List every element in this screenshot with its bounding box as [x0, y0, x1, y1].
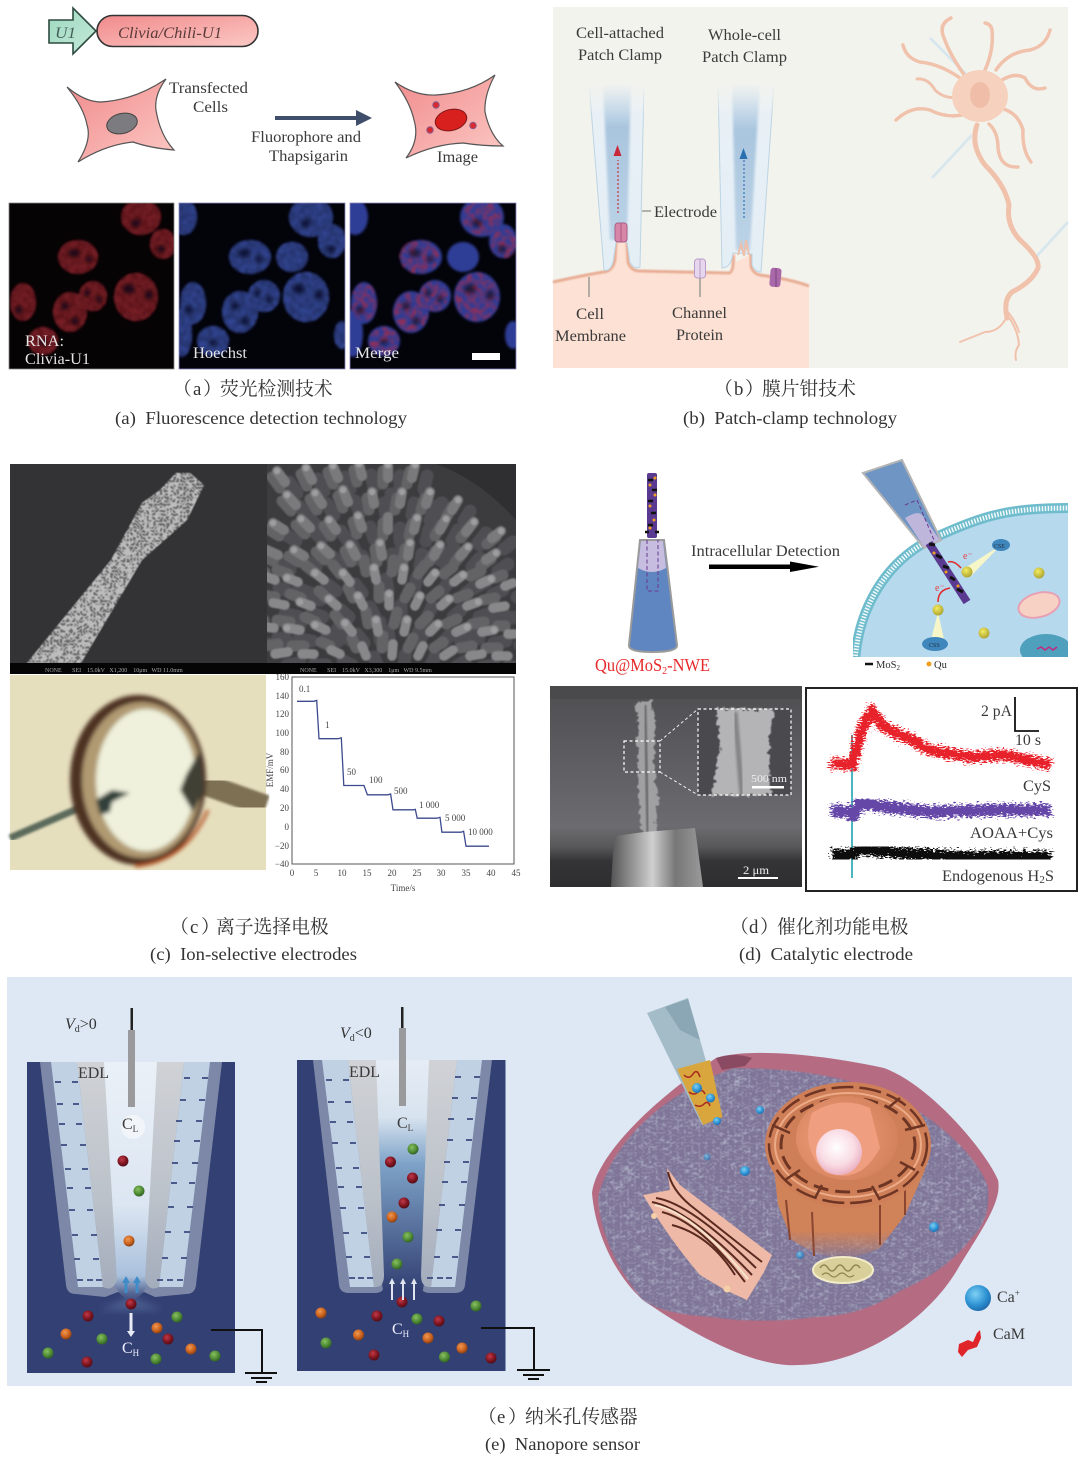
- icon: Clivia/Chili-U1 construct: [97, 16, 258, 46]
- label: Fluorophore and Thapsigarin: Thapsigarin: [269, 148, 348, 165]
- electrode: cell-attached: [589, 83, 644, 270]
- caption b: （: [714, 378, 733, 400]
- nanopipette: [647, 998, 722, 1125]
- label: Qu@MoS2-NWE: 2: [662, 665, 667, 677]
- legend: [865, 660, 948, 672]
- chart: amperometric traces: 2 pA: [981, 703, 1012, 720]
- mitochondrion: [813, 1257, 873, 1283]
- icon: imaged cell: [395, 75, 503, 158]
- chart: EMF vs time: 5 000: [445, 813, 466, 823]
- label: Qu@MoS2-NWE: Qu@MoS: [595, 655, 669, 675]
- caption a: ）: [203, 378, 222, 400]
- label: Fluorophore and Thapsigarin: [251, 129, 361, 165]
- chart: EMF vs time: 40: [486, 868, 496, 878]
- nanopore unit: Vd less than 0: V: [340, 1025, 350, 1042]
- caption a: （: [173, 378, 192, 400]
- SEM: electrode overview: NONE SEI 15.0kV X1,200 10μm WD 11.0mm: [45, 668, 183, 674]
- nanopore unit: Vd greater than 0: H: [133, 1348, 140, 1358]
- icon: Clivia/Chili-U1 construct: Clivia/Chili-U1: [118, 25, 222, 42]
- arrow: detection: [709, 562, 819, 572]
- chart: EMF vs time: Time/s: [391, 883, 416, 893]
- caption b: (b) Patch-clamp technology: [683, 408, 897, 429]
- chart: EMF vs time: 0: [290, 868, 295, 878]
- micrograph: Merge: Merge: [355, 345, 399, 362]
- chart: EMF vs time: 1 000: [419, 800, 440, 810]
- caption e: e: [497, 1407, 505, 1428]
- nanopore unit: Vd greater than 0: [27, 1008, 277, 1382]
- caption b: b: [734, 379, 743, 400]
- micrograph: Merge: [342, 197, 521, 369]
- SEM: electrode overview: [10, 464, 267, 674]
- chart: EMF vs time: 60: [280, 765, 290, 775]
- chart: amperometric traces: Endogenous H: [942, 868, 1037, 885]
- chart: EMF vs time: 35: [462, 868, 471, 878]
- legend: 2: [896, 664, 900, 672]
- caption e: （: [478, 1406, 497, 1428]
- caption a: (a) Fluorescence detection technology: [115, 408, 407, 429]
- channel proteins: [615, 223, 782, 287]
- chart: EMF vs time: 45: [512, 868, 521, 878]
- nanopore unit: Vd greater than 0: C: [122, 1340, 133, 1357]
- chart: EMF vs time: 50: [347, 767, 356, 777]
- nanopore unit: Vd greater than 0: V: [65, 1016, 75, 1033]
- diagram: electrode in cell: e⁻: [963, 551, 973, 562]
- panel e: nanopore sensor: [7, 977, 1072, 1386]
- photo: cell with pipettes: [10, 675, 266, 870]
- labels: Patch Clamp: [578, 47, 662, 64]
- legend: Ca+ and CaM: +: [1015, 1288, 1020, 1298]
- micrograph: RNA Clivia-U1: Clivia-U1: [25, 351, 90, 368]
- nanopore unit: Vd greater than 0: C: [122, 1116, 133, 1133]
- chart: amperometric traces: 10 s: [1015, 732, 1041, 749]
- legend: MoS: [876, 660, 896, 671]
- nanopore unit: Vd less than 0: <0: [355, 1025, 372, 1042]
- panel c: ion-selective electrodes: [10, 464, 527, 893]
- micrograph: RNA Clivia-U1: RNA:: [25, 333, 64, 350]
- chart: amperometric traces: CyS: [1023, 778, 1051, 795]
- chart: EMF vs time: −40: [275, 859, 289, 869]
- labels: Cell: [576, 306, 605, 323]
- caption d: d: [749, 917, 759, 938]
- legend: Ca+ and CaM: Ca: [997, 1289, 1015, 1306]
- label: Transfected Cells: Transfected: [169, 80, 248, 97]
- caption b: ）: [745, 378, 764, 400]
- rim shadows: [716, 1055, 752, 1070]
- chart: amperometric traces: S: [1045, 868, 1054, 885]
- chart: EMF vs time: [265, 672, 521, 893]
- chart: EMF vs time: 140: [276, 691, 290, 701]
- chart: EMF vs time: 10 000: [468, 827, 493, 837]
- labels: Membrane: [555, 328, 626, 345]
- caption a: 荧光检测技术: [220, 378, 333, 400]
- nanopore unit: Vd less than 0: C: [392, 1321, 403, 1338]
- nanowire electrode: [629, 473, 677, 652]
- cell membrane: [553, 242, 809, 368]
- chart: EMF vs time: 20: [388, 868, 397, 878]
- chart: amperometric traces: AOAA+Cys: [970, 825, 1053, 842]
- panel background: [553, 7, 1068, 368]
- cytoplasm surface: [598, 1068, 988, 1321]
- chart: EMF vs time: 30: [436, 868, 446, 878]
- caption e: [478, 1406, 640, 1455]
- chart: amperometric traces: [806, 688, 1077, 891]
- chart: EMF vs time: 160: [276, 672, 290, 682]
- icon: transfected cell: [67, 79, 174, 162]
- panel b: patch clamp: [553, 7, 1068, 368]
- micrograph: RNA Clivia-U1: [9, 199, 176, 369]
- diagram: electrode in cell: CSE: [994, 544, 1005, 550]
- nanopore unit: Vd greater than 0: >0: [80, 1016, 97, 1033]
- labels: Channel: [672, 305, 728, 322]
- SEM: nanorods: NONE SEI 15.0kV X3,300 1μm WD 9.5mm: [300, 668, 432, 674]
- caption a: [115, 378, 407, 429]
- chart: EMF vs time: 0.1: [299, 684, 310, 694]
- cell wall: [592, 1053, 999, 1365]
- icon: U1 promoter arrow: U1: [55, 25, 76, 42]
- caption c: c: [190, 917, 198, 938]
- labels: Protein: [676, 327, 723, 344]
- labels: [555, 25, 787, 345]
- caption c: 离子选择电极: [216, 915, 329, 938]
- chart: EMF vs time: 40: [280, 784, 290, 794]
- label: Qu@MoS2-NWE: -NWE: [667, 655, 710, 675]
- nanopore unit: Vd less than 0: [297, 1007, 550, 1379]
- leader lines: [589, 211, 700, 297]
- caption c: （: [170, 916, 189, 938]
- label: Intracellular Detection: Intracellular Detection: [691, 543, 840, 560]
- caption c: (c) Ion-selective electrodes: [150, 944, 357, 965]
- diagram: electrode in cell: CSS: [929, 643, 940, 649]
- panel background: [7, 977, 1072, 1386]
- chart: EMF vs time: 100: [276, 728, 290, 738]
- chart: EMF vs time: 25: [412, 868, 422, 878]
- chart: EMF vs time: 1: [325, 720, 330, 730]
- nanopore unit: Vd less than 0: d: [350, 1033, 355, 1044]
- panel d: catalytic electrode: [550, 460, 1077, 891]
- nanopore unit: Vd greater than 0: L: [133, 1124, 138, 1134]
- caption d: （: [730, 916, 749, 938]
- Golgi apparatus: [643, 1168, 772, 1300]
- caption d: (d) Catalytic electrode: [739, 944, 913, 965]
- caption d: [730, 915, 913, 965]
- SEM: nanowire electrode: 2 μm: [743, 865, 769, 877]
- caption e: 纳米孔传感器: [525, 1406, 638, 1428]
- legend: Ca+ and CaM: [958, 1285, 1025, 1357]
- electrode: whole-cell: [718, 83, 774, 272]
- labels: Patch Clamp: [702, 49, 787, 66]
- diagram: electrode in cell: [855, 460, 1075, 666]
- labels: Whole-cell: [708, 27, 782, 44]
- chart: EMF vs time: 500: [394, 786, 408, 796]
- diagram: electrode in cell: e⁻: [935, 583, 945, 594]
- label: Transfected Cells: [169, 80, 248, 116]
- nanopore unit: Vd less than 0: EDL: [349, 1064, 380, 1081]
- chart: EMF vs time: −20: [275, 841, 289, 851]
- nanopore unit: Vd less than 0: H: [403, 1329, 410, 1339]
- caption e: (e) Nanopore sensor: [485, 1434, 640, 1455]
- caption b: [683, 378, 897, 429]
- 3D cell: [592, 998, 999, 1365]
- arrow: treatment: [275, 110, 372, 126]
- icon: U1 promoter arrow: [49, 8, 96, 54]
- nanopore unit: Vd greater than 0: EDL: [78, 1065, 109, 1082]
- legend: Qu: [934, 660, 948, 671]
- SEM: nanowire electrode: 500 nm: [751, 774, 787, 785]
- label: Image: Image: [437, 149, 478, 166]
- caption d: ）: [760, 916, 779, 938]
- neuron: [896, 18, 1068, 360]
- SEM: nanorods: [256, 464, 527, 674]
- chart: EMF vs time: 10: [338, 868, 347, 878]
- legend: Ca+ and CaM: CaM: [993, 1326, 1025, 1343]
- caption d: 催化剂功能电极: [777, 915, 909, 938]
- chart: EMF vs time: 20: [280, 803, 290, 813]
- chart: EMF vs time: 80: [280, 747, 290, 757]
- caption c: ）: [201, 916, 220, 938]
- nanopore unit: Vd less than 0: L: [408, 1123, 413, 1133]
- caption a: a: [193, 379, 202, 400]
- caption c: [150, 915, 357, 965]
- chart: EMF vs time: 100: [369, 775, 383, 785]
- calcium ions: [704, 1106, 939, 1259]
- chart: amperometric traces: 2: [1039, 874, 1045, 886]
- labels: Electrode: [654, 204, 717, 221]
- label: Transfected Cells: Cells: [193, 99, 228, 116]
- nanopore unit: Vd less than 0: C: [397, 1115, 408, 1132]
- SEM: nanowire electrode: [550, 686, 802, 887]
- chart: EMF vs time: 5: [314, 868, 319, 878]
- caption b: 膜片钳技术: [762, 378, 856, 400]
- chart: EMF vs time: EMF/mV: [265, 752, 275, 787]
- chart: EMF vs time: 0: [284, 822, 290, 832]
- micrograph: Hoechst: [171, 197, 350, 369]
- caption e: ）: [508, 1406, 527, 1428]
- chart: EMF vs time: 120: [276, 709, 290, 719]
- nanopore unit: Vd greater than 0: d: [75, 1024, 80, 1035]
- panel a: fluorescence detection: [9, 8, 521, 369]
- endoplasmic reticulum and nucleus: [765, 1082, 931, 1257]
- micrograph: Hoechst: Hoechst: [193, 345, 248, 362]
- labels: Cell-attached: [576, 25, 664, 42]
- chart: EMF vs time: 15: [362, 868, 372, 878]
- label: Fluorophore and Thapsigarin: Fluorophore and: [251, 129, 361, 146]
